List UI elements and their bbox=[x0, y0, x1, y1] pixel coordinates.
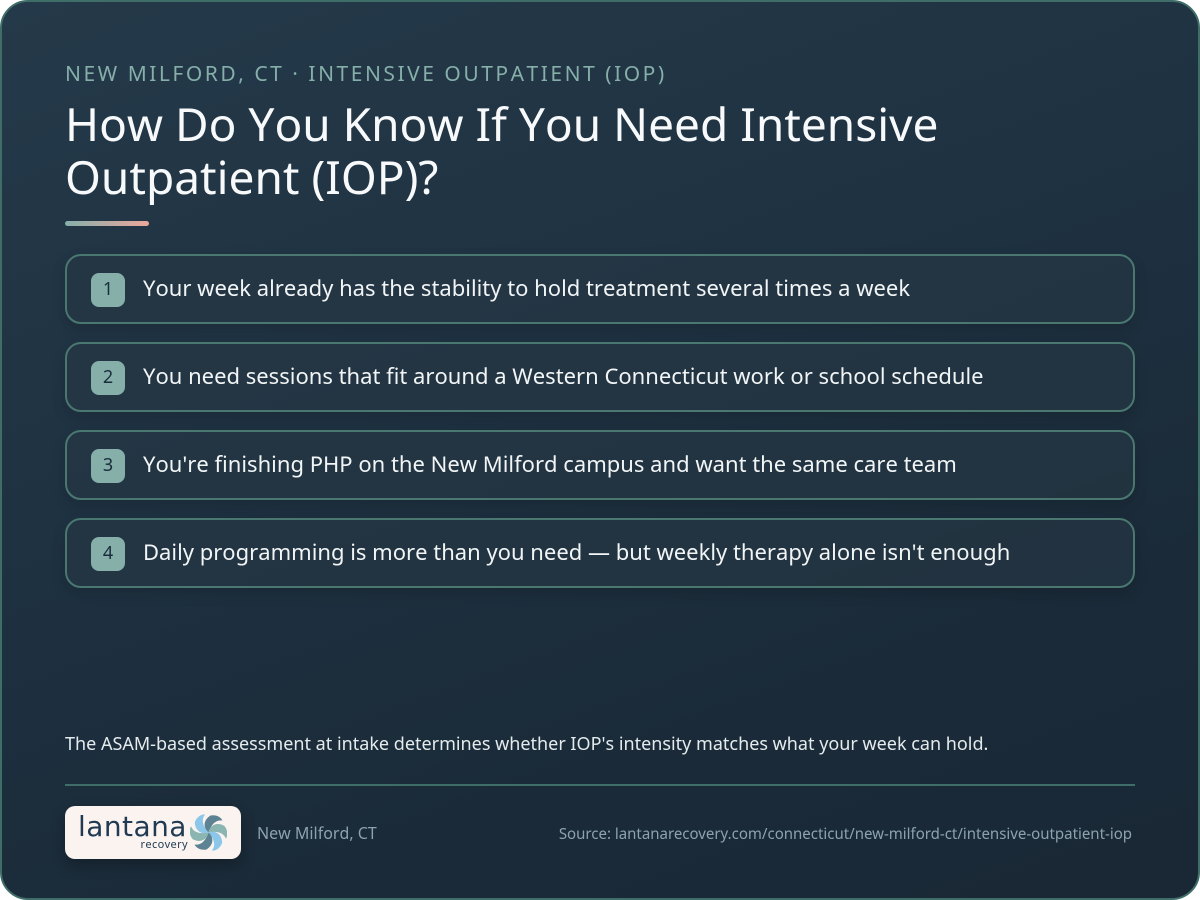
logo card bbox=[65, 806, 241, 859]
title bbox=[65, 93, 938, 208]
number badge 4: 4 bbox=[103, 541, 113, 565]
source line: Source: lantanarecovery.com/connecticut/new-milford-ct/intensive-outpatient-iop bbox=[559, 824, 1132, 844]
title accent bar bbox=[65, 221, 149, 226]
number badge 2: 2 bbox=[103, 365, 113, 389]
number badge 1 bbox=[91, 273, 125, 307]
footnote text: The ASAM-based assessment at intake determines whether IOP's intensity matches what your week can hold. bbox=[65, 732, 988, 756]
number badge 1: 1 bbox=[103, 277, 113, 301]
item 1 text: Your week already has the stability to hold treatment several times a week bbox=[143, 273, 910, 303]
number badge 2 bbox=[91, 361, 125, 395]
number badge 3 bbox=[91, 449, 125, 483]
title: Outpatient (IOP)? bbox=[65, 146, 438, 208]
logo wordmark: lantana bbox=[78, 810, 187, 843]
footer divider bbox=[65, 784, 1135, 786]
list item 1 bbox=[65, 254, 1135, 324]
list item 4 bbox=[65, 518, 1135, 588]
location label: New Milford, CT bbox=[257, 822, 377, 844]
title: How Do You Know If You Need Intensive bbox=[65, 93, 938, 155]
number badge 4 bbox=[91, 537, 125, 571]
list item 3 bbox=[65, 430, 1135, 500]
item 2 text: You need sessions that fit around a Western Connecticut work or school schedule bbox=[143, 361, 984, 391]
eyebrow: NEW MILFORD, CT · INTENSIVE OUTPATIENT (IOP) bbox=[65, 60, 667, 88]
item 3 text: You're finishing PHP on the New Milford campus and want the same care team bbox=[143, 449, 957, 479]
number badge 3: 3 bbox=[103, 453, 113, 477]
list item 2 bbox=[65, 342, 1135, 412]
icon: pinwheel logo mark bbox=[190, 814, 227, 851]
logo subtext: recovery bbox=[140, 837, 188, 852]
item 4 text: Daily programming is more than you need — but weekly therapy alone isn't enough bbox=[143, 537, 1010, 567]
